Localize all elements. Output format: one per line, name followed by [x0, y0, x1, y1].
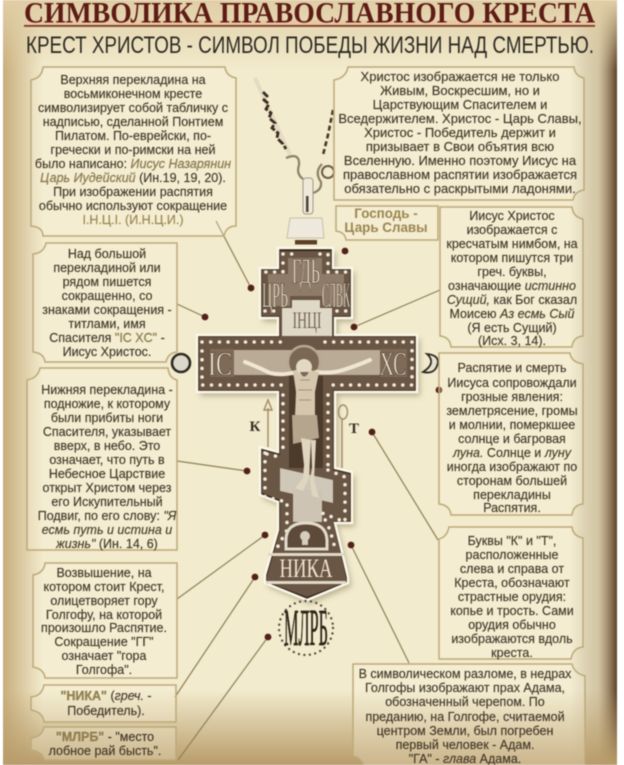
title plate — [282, 300, 332, 336]
icon: moon — [423, 354, 438, 373]
panel: nimbus: Моисею Аз есмь Сый — [449, 307, 575, 321]
panel: top crossbar: Пилатом. По-еврейски, по- — [55, 129, 211, 143]
panel: lower crossbar: есмь путь и истина и — [42, 523, 172, 537]
panel: lower crossbar: были прибиты ноги — [51, 411, 163, 425]
bar inner plate — [234, 350, 380, 375]
panel: lower crossbar: открыт Христом через — [43, 481, 172, 495]
panel: top crossbar: Верхняя перекладина на — [60, 73, 206, 87]
cross — [197, 248, 420, 604]
panel: name of the Saviour — [33, 243, 177, 362]
panel: nimbus: греч. буквы, — [477, 265, 547, 279]
panel: lower crossbar: Небесное Царствие — [49, 467, 165, 481]
cross: ІС — [208, 346, 232, 383]
panel: letters K and T: Креста, обозначают — [454, 576, 570, 590]
panel: lower crossbar: означает, что путь в — [49, 453, 165, 467]
panel: Christ the Saviour: обязательно с раскрытыми ладонями. — [344, 181, 576, 196]
panel: nimbus: котором пишутся три — [451, 251, 573, 265]
icon: sun — [172, 354, 190, 372]
panel: Christ the Saviour: Живым, Воскресшим, но и — [380, 83, 540, 98]
panel: letters K and T: страстные орудия: — [458, 590, 566, 604]
text: МЛРБ — [284, 600, 328, 657]
panel: top crossbar: обычно используют сокращение — [39, 199, 227, 213]
figure of Christ — [245, 346, 370, 498]
letter Т with reed: Т — [349, 421, 359, 437]
panel: nimbus: (Исх. 3, 14). — [478, 334, 546, 348]
cross: ІНЦІ — [292, 308, 322, 333]
panel: Golgotha: Голгофу, на которой — [46, 608, 162, 622]
panel: crucifixion signs: Распятия. — [483, 501, 541, 515]
panel: top crossbar: Царь Иудейский (Ин.19, 19, 20). — [40, 171, 226, 185]
panel: lower crossbar: его Искупительный — [51, 495, 163, 509]
panel: name of the Saviour: знаками сокращения - — [42, 303, 172, 317]
panel: crucifixion signs: перекладины — [473, 488, 551, 502]
panel: name of the Saviour: Иисус Христос. — [63, 345, 151, 359]
panel: МЛРБ: лобное рай бысть". — [49, 744, 161, 758]
panel: top crossbar — [31, 67, 236, 236]
top centre shading — [268, 258, 344, 306]
panel: letters K and T: креста. — [491, 646, 533, 660]
panel: crucifixion signs: и молнии, померкшее — [449, 418, 575, 432]
panel: letters K and T — [439, 527, 583, 660]
panel: Golgotha: Возвышение, на — [56, 566, 152, 580]
panel: lower crossbar: подножие, к которому — [44, 397, 171, 411]
panel: lower crossbar: вверх, в небо. Это — [54, 439, 160, 453]
panel: lower crossbar: Спасителя, указывает — [43, 425, 171, 439]
panel: crucifixion signs: иногда изображают по — [447, 460, 577, 474]
letter К with spear — [250, 400, 272, 447]
panel: НИКА — [31, 685, 176, 722]
panel: Lord King of Glory: Господь - — [354, 206, 418, 221]
panel: Golgotha — [33, 563, 177, 678]
panel: letters K and T: Буквы "К" и "Т", — [468, 534, 556, 548]
chain and pendant bail — [255, 78, 334, 244]
panel: nimbus: Сущий, как Бог сказал — [447, 293, 577, 307]
panel: nimbus: Иисус Христос — [469, 209, 555, 223]
panel: Adam's skull: В символическом разломе, в недрах — [359, 667, 572, 681]
panel: top crossbar: восьмиконечном кресте — [64, 87, 202, 101]
panel: МЛРБ: "МЛРБ" - "место — [56, 730, 154, 744]
panel: Christ the Saviour — [334, 67, 584, 200]
dots: leader line ends — [202, 248, 442, 640]
panel: nimbus: (Я есть Сущий) — [467, 321, 557, 335]
panel: name of the Saviour: Над большой — [68, 247, 146, 261]
panel: top crossbar: I.Н.Ц.I. (И.Н.Ц.И.) — [82, 213, 184, 227]
panel: Christ the Saviour: призывает в Свои объятия всю — [366, 139, 554, 154]
stem dark centre — [289, 376, 323, 468]
panel: name of the Saviour: Спасителя "IC XC" - — [49, 331, 165, 345]
panel: crucifixion signs — [439, 353, 583, 515]
panel: top crossbar: надписью, сделанной Понтием — [43, 115, 223, 129]
panel: Adam's skull: первый человек - Адам. — [396, 738, 534, 752]
cross: ЦРЬ — [262, 275, 288, 315]
panel: crucifixion signs: землетрясение, громы — [446, 404, 578, 418]
panel: top crossbar: гречески и по-римски на ней — [51, 143, 215, 157]
panel: crucifixion signs: солнце и багровая — [458, 432, 566, 446]
letter Т with reed — [338, 405, 359, 468]
МЛРБ medallion — [279, 600, 333, 657]
cross shadow — [200, 252, 420, 604]
dot borders — [202, 254, 412, 548]
panel: name of the Saviour: перекладиной или — [53, 261, 161, 275]
panel: nimbus: изображается с — [467, 223, 557, 237]
panel: crucifixion signs: луна. Солнце и луну — [452, 446, 572, 460]
panel: Adam's skull: Голгофы изображают прах Адама, — [365, 681, 565, 695]
panel: letters K and T: слева и справа от — [460, 562, 564, 576]
panel: Christ the Saviour: Вседержителем. Христос - Царь Славы, — [338, 111, 582, 126]
panel: letters K and T: копье и трость. Сами — [450, 604, 574, 618]
panel: lower crossbar — [27, 368, 177, 551]
panel: top crossbar: было написано: Иисус Назарянин — [35, 157, 231, 171]
cross: НИКА — [280, 554, 333, 583]
panel: Golgotha: означает "гора — [62, 649, 146, 663]
panel: Golgotha: Голгофа". — [76, 663, 132, 677]
skull arch — [286, 523, 327, 549]
panel: crucifixion signs: грозные явления: — [461, 390, 563, 404]
panel: top crossbar: символизирует собой табличку с — [38, 101, 228, 115]
lower slanted plate — [280, 468, 333, 503]
panel: nimbus: кресчатым нимбом, на — [446, 237, 578, 251]
panel: nimbus: означающие истинно — [448, 279, 576, 293]
НИКА plate — [268, 553, 344, 556]
leader lines — [175, 221, 440, 760]
panel: top crossbar: При изображении распятия — [53, 185, 213, 199]
panel: Christ the Saviour: православном распятии изображается — [343, 167, 577, 182]
letter К with spear: К — [250, 419, 261, 435]
cross: СЛВК — [322, 275, 350, 315]
panel: Adam's skull: обозначенный черепом. По — [385, 695, 545, 709]
panel: Golgotha: котором стоит Крест, — [43, 580, 165, 594]
panel: Christ the Saviour: Вселенную. Именно поэтому Иисус на — [344, 153, 577, 168]
panel: name of the Saviour: рядом пишется — [63, 275, 151, 289]
panel: Christ the Saviour: Христос - Победитель держит и — [364, 125, 556, 140]
cross body — [197, 248, 417, 600]
panel: lower crossbar: Нижняя перекладина - — [41, 383, 173, 397]
panel: letters K and T: изображаются вдоль — [451, 632, 573, 646]
panel: name of the Saviour: сокращенно, со — [62, 289, 152, 303]
panel: crucifixion signs: сторонам большей — [457, 474, 567, 488]
panel: Christ the Saviour: Христос изображается не только — [361, 69, 559, 84]
panel: letters K and T: расположенные — [466, 548, 558, 562]
cross: ХС — [380, 346, 406, 383]
panel: Adam's skull: центром Земли, был погребен — [377, 724, 553, 738]
panel: Golgotha: произошло Распятие. — [41, 621, 167, 635]
panel: Golgotha: олицетворяет гору — [50, 594, 158, 608]
panel: name of the Saviour: титлами, имя — [68, 317, 146, 331]
panel: Golgotha: Сокращение "ГГ" — [54, 635, 154, 649]
panel: letters K and T: орудия обычно — [468, 618, 556, 632]
panel: crucifixion signs: Иисуса сопровождали — [447, 376, 577, 390]
panel: lower crossbar: жизнь" (Ин. 14, 6) — [55, 537, 158, 551]
panel: Christ the Saviour: Царствующим Спасителем и — [373, 97, 547, 112]
panel: lower crossbar: Подвиг, по его слову: "Я — [38, 509, 177, 523]
cross: ГДЬ — [292, 251, 320, 291]
panel: Adam's skull — [353, 664, 585, 765]
panel: Lord King of Glory — [336, 206, 438, 240]
panel: МЛРБ — [31, 727, 176, 760]
panel: Lord King of Glory: Царь Славы — [344, 220, 428, 235]
panel: nimbus — [440, 207, 583, 348]
panel: НИКА: Победитель). — [67, 704, 145, 718]
panel: Adam's skull: преданию, на Голгофе, считаемой — [365, 710, 565, 724]
panel: crucifixion signs: Распятие и смерть — [458, 361, 566, 375]
panel: НИКА: "НИКА" (греч. - — [60, 689, 152, 703]
